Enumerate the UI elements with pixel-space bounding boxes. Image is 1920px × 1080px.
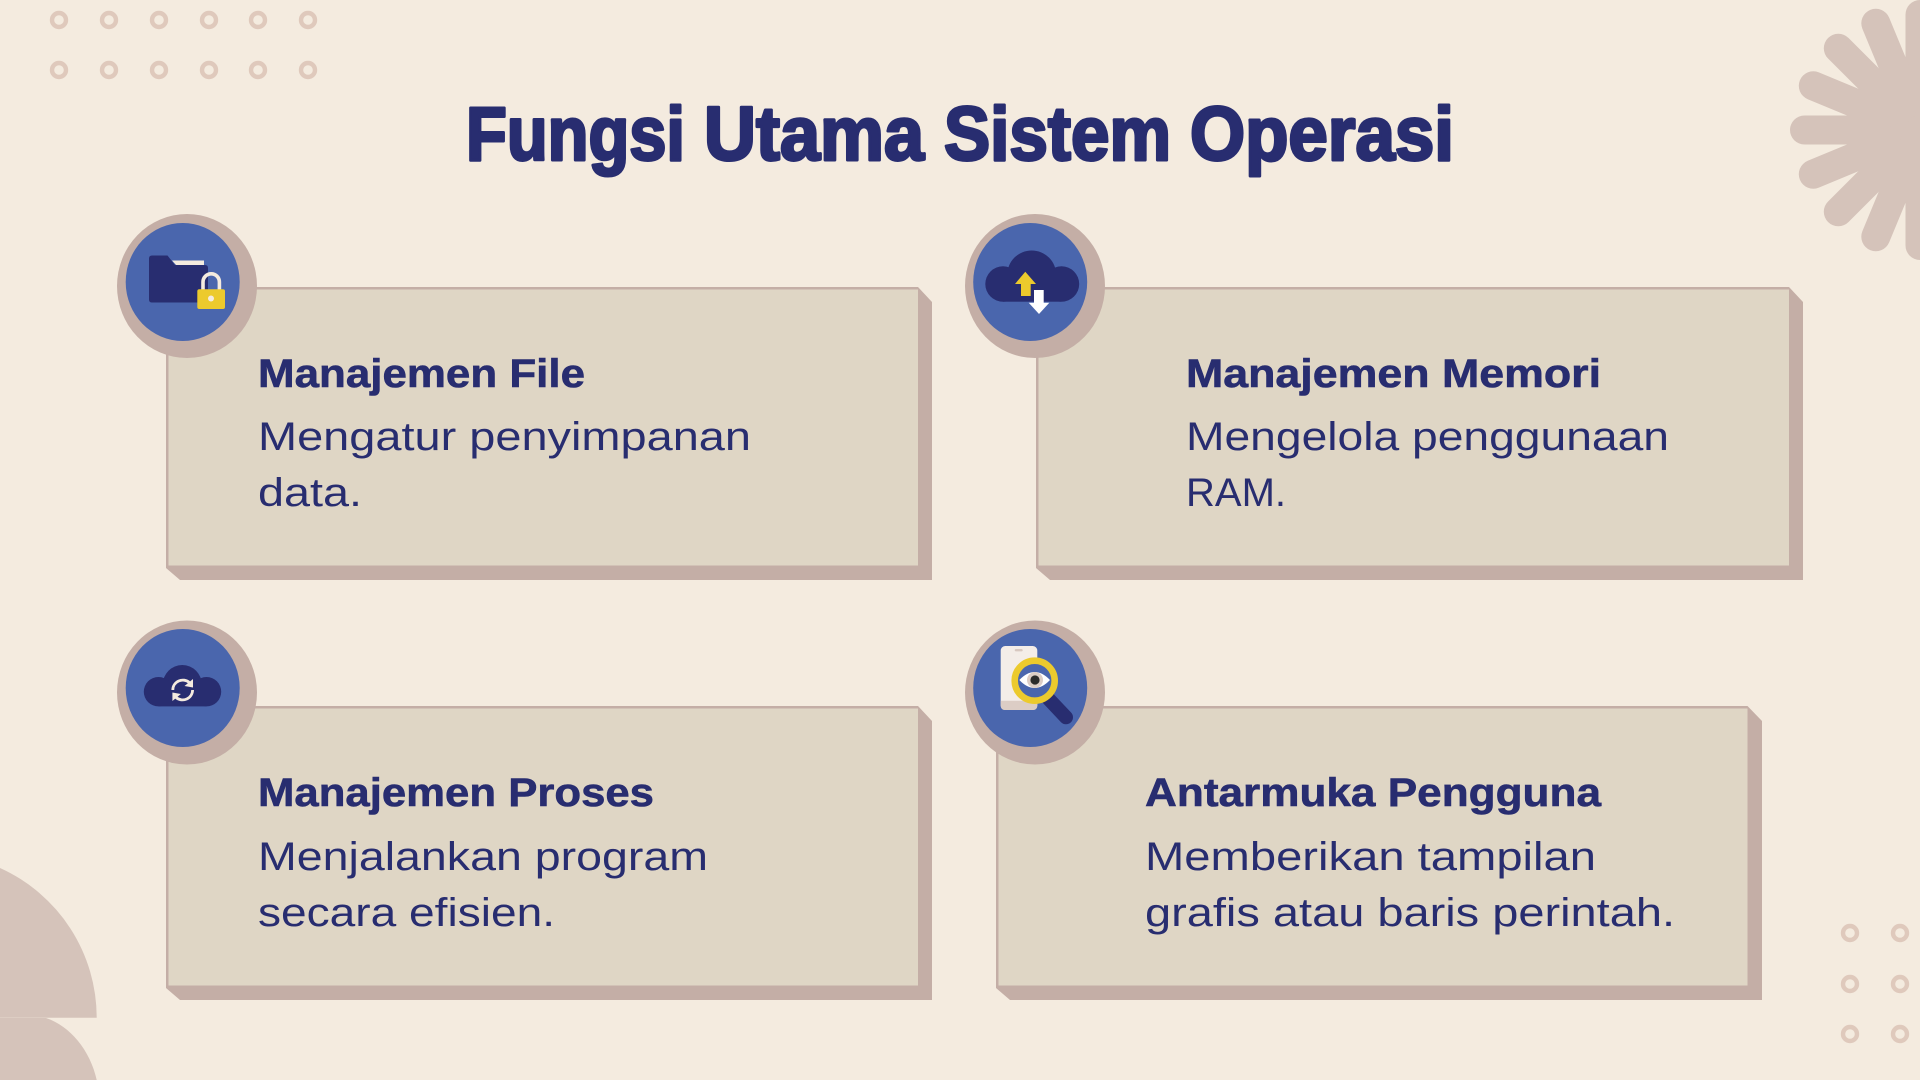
icon: cloud upload and download — [965, 214, 1105, 358]
body text: Manajemen Proses: secara efisien. — [258, 891, 555, 935]
body text: Manajemen Proses: Menjalankan program — [258, 835, 708, 879]
decoration: bottom-right dot grid — [1843, 926, 1907, 1041]
body text: Manajemen Memori: Mengelola penggunaan — [1186, 415, 1669, 459]
icon: phone with magnifying glass and eye — [965, 620, 1105, 764]
decoration: top-left dot grid — [52, 13, 315, 77]
icon: cloud sync — [117, 620, 257, 764]
heading: Antarmuka Pengguna: Antarmuka Pengguna — [1145, 771, 1602, 815]
title — [466, 92, 1454, 177]
panel: Manajemen Proses — [117, 620, 932, 1000]
decoration: bottom-left semicircles — [0, 868, 97, 1080]
title: Sistem — [944, 92, 1171, 177]
icon: folder with padlock — [117, 214, 257, 358]
heading: Manajemen File: Manajemen File — [258, 352, 585, 396]
decoration: top-right flower — [1804, 14, 1920, 246]
title: Fungsi — [466, 92, 685, 177]
panel: Manajemen Memori — [965, 214, 1803, 580]
body text: Manajemen Proses — [258, 835, 708, 935]
heading: Manajemen Proses: Manajemen Proses — [258, 771, 654, 815]
body text: Manajemen Memori: RAM. — [1186, 471, 1286, 515]
heading: Manajemen Memori: Manajemen Memori — [1186, 352, 1601, 396]
body text: Manajemen File: Mengatur penyimpanan — [258, 415, 751, 459]
title: Operasi — [1190, 92, 1454, 177]
title: Utama — [704, 92, 925, 177]
panel: Manajemen File — [117, 214, 932, 580]
body text: Manajemen Memori — [1186, 415, 1669, 515]
body text: Antarmuka Pengguna — [1145, 835, 1675, 935]
body text: Manajemen File — [258, 415, 751, 515]
body text: Manajemen File: data. — [258, 471, 362, 515]
body text: Antarmuka Pengguna: Memberikan tampilan — [1145, 835, 1596, 879]
panel: Antarmuka Pengguna — [965, 620, 1762, 1000]
body text: Antarmuka Pengguna: grafis atau baris perintah. — [1145, 891, 1675, 935]
